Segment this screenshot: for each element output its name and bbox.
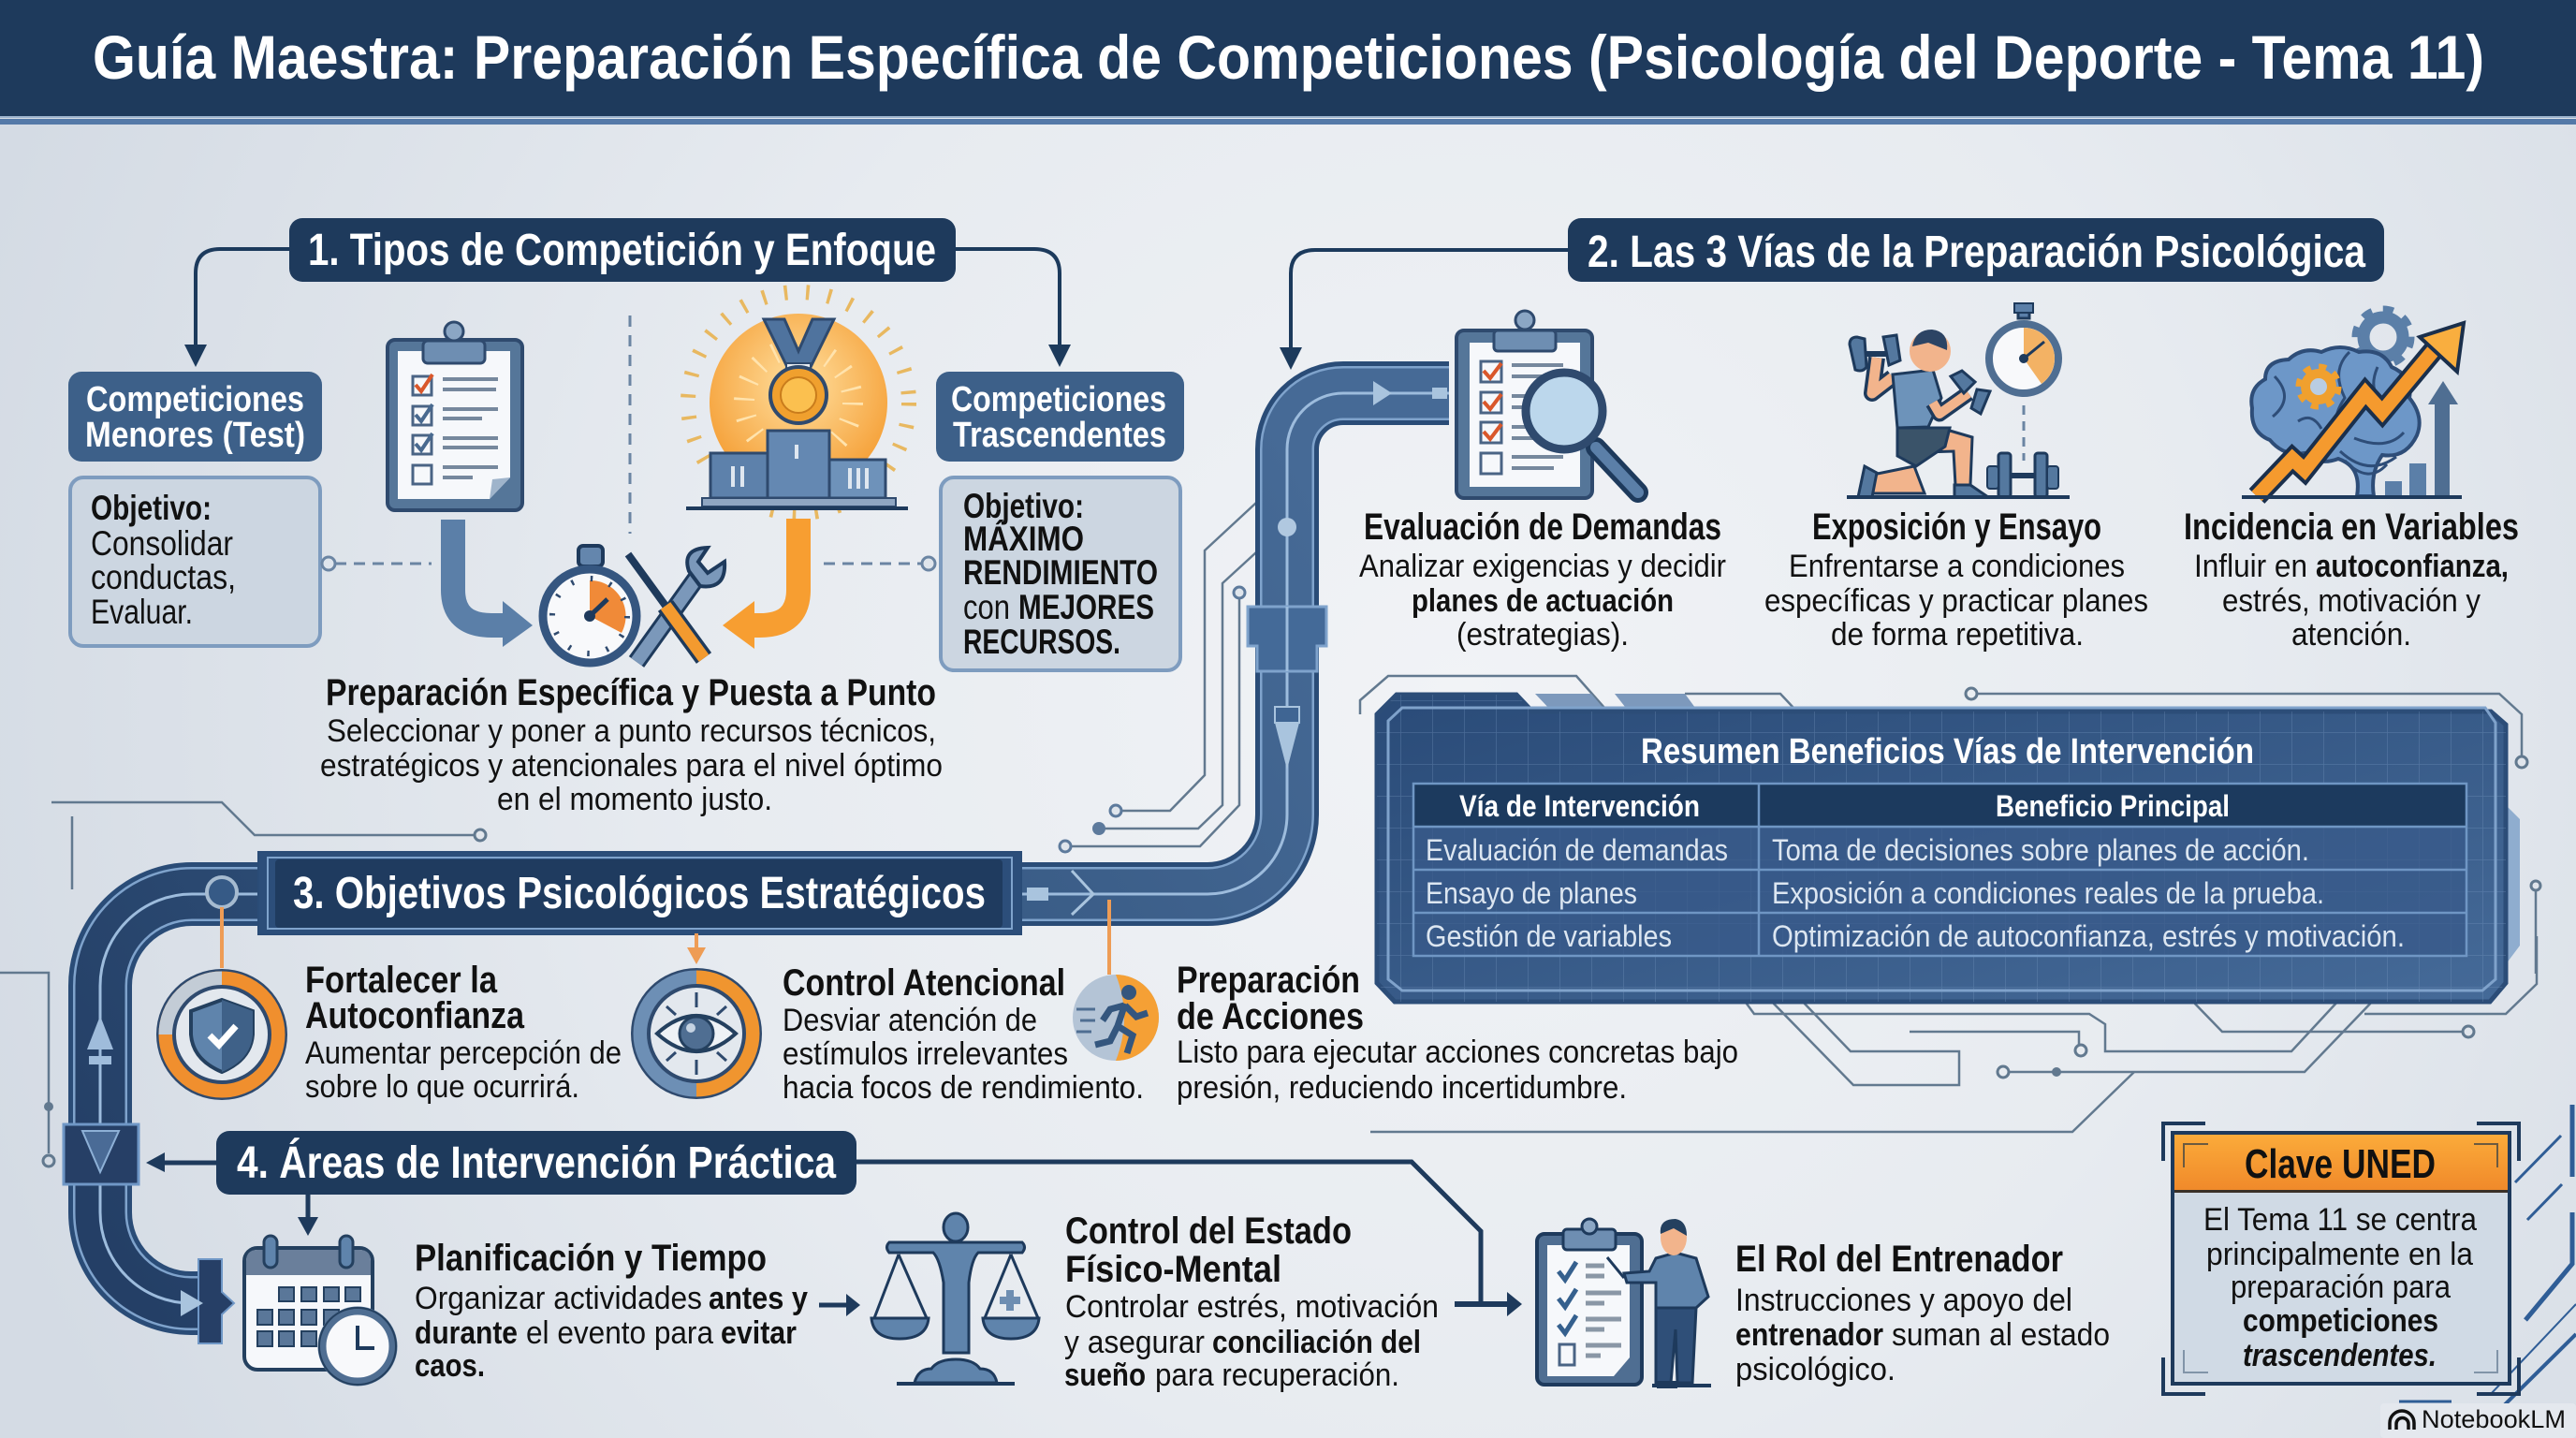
panel: resumen beneficios table: Ensayo de planes [1426,876,1637,910]
divider dashed [629,315,631,534]
panel: competiciones menores: Objetivo: [91,489,212,527]
text block: incidencia en variables: Influir en [2194,549,2307,584]
text block: planificación y tiempo: Planificación y Tiempo [415,1238,767,1279]
arrow: orange into preparation [723,519,798,649]
text block: control atencional [783,962,1144,1106]
text block: incidencia en variables: autoconfianza, [2316,549,2509,584]
text block: fortalecer la autoconfianza [305,960,622,1105]
text block: control del estado: Controlar estrés, motivación [1065,1289,1439,1325]
text block: exposición y ensayo: Enfrentarse a condiciones [1789,549,2125,584]
text block: planificación y tiempo: antes y [709,1281,808,1316]
panel: resumen beneficios table [1377,694,2520,1002]
icon: shield ring [156,969,287,1100]
text block: incidencia en variables: estrés, motivación y [2222,583,2481,619]
text block: preparación específica [320,672,943,817]
panel: resumen beneficios table: Resumen Beneficios Vías de Intervención [1641,732,2254,771]
panel: resumen beneficios table: Evaluación de demandas [1426,833,1728,867]
panel: competiciones menores: Competiciones [86,380,304,419]
text block: control del estado: sueño [1064,1357,1146,1393]
heading: section 3: 3. Objetivos Psicológicos Estratégicos [293,869,986,918]
text block: control del estado: para recuperación. [1155,1357,1399,1393]
panel: resumen beneficios table: Beneficio Principal [1996,789,2230,823]
text block: control atencional: Control Atencional [783,962,1065,1004]
text block: control atencional: estímulos irrelevantes [783,1036,1068,1072]
panel: competiciones trascendentes: Objetivo: [963,487,1084,525]
icon: coach with clipboard [1537,1219,1711,1387]
text block: exposición y ensayo: Exposición y Ensayo [1812,506,2101,548]
callout: clave uned: Clave UNED [2245,1141,2436,1187]
text block: el rol del entrenador [1735,1239,2110,1387]
icon: eye ring [631,968,762,1099]
callout: clave uned [2163,1123,2519,1394]
text block: fortalecer la autoconfianza: sobre lo que ocurrirá. [305,1069,579,1105]
text block: planificación y tiempo [415,1238,808,1384]
text block: fortalecer la autoconfianza: Fortalecer la [305,960,498,1001]
heading: section 1 [184,218,1071,367]
callout: clave uned: El Tema 11 se centra [2203,1202,2477,1238]
panel: competiciones menores [68,372,322,646]
text block: evaluación de demandas: (estrategias). [1456,617,1629,653]
panel: resumen beneficios table: Gestión de variables [1426,919,1672,953]
panel: competiciones menores: Menores (Test) [85,416,305,455]
text block: control atencional: hacia focos de rendimiento. [783,1070,1144,1106]
panel: resumen beneficios table: Toma de decisiones sobre planes de acción. [1772,833,2309,867]
panel: competiciones menores: conductas, [91,558,236,596]
panel: resumen beneficios table: Optimización de autoconfianza, estrés y motivación. [1772,919,2405,953]
panel: competiciones trascendentes: con [963,588,1010,626]
decorative diagonal lines [2399,1105,2576,1438]
panel: competiciones trascendentes: Competiciones [951,380,1166,419]
text block: preparación de acciones: Preparación [1177,960,1360,1001]
heading: section 2 [1280,218,2384,370]
panel: competiciones trascendentes: MÁXIMO [963,520,1084,558]
dashed connectors [322,557,935,570]
text block: preparación de acciones: presión, reduciendo incertidumbre. [1177,1070,1627,1106]
text block: exposición y ensayo [1764,506,2148,653]
text block: preparación específica: Seleccionar y poner a punto recursos técnicos, [327,713,936,749]
icon: stopwatch and tools [543,546,724,663]
text block: control del estado: y asegurar [1064,1325,1205,1360]
heading: section 3 [258,852,1021,934]
title bar [0,0,2576,125]
text block: fortalecer la autoconfianza: Autoconfianza [305,995,525,1036]
callout: clave uned: trascendentes. [2243,1338,2437,1373]
icon: brain with rising arrow [2242,310,2464,499]
heading: section 4: 4. Áreas de Intervención Práctica [237,1137,836,1188]
callout: clave uned: competiciones [2243,1303,2438,1339]
pipeline connecting sections [64,381,1449,1343]
icon: medal on podium [686,292,909,513]
panel: resumen beneficios table: Exposición a condiciones reales de la prueba. [1772,876,2324,910]
text block: preparación de acciones: de Acciones [1177,996,1364,1037]
text block: control atencional: Desviar atención de [783,1003,1037,1038]
text block: el rol del entrenador: Instrucciones y apoyo del [1735,1283,2072,1318]
watermark: notebooklm: NotebookLM [2422,1405,2566,1433]
watermark: notebooklm [2380,1403,2576,1438]
text block: el rol del entrenador: psicológico. [1735,1352,1895,1387]
text block: control del estado: conciliación del [1212,1325,1421,1360]
callout: clave uned: preparación para [2231,1269,2451,1305]
icon: runner [1073,975,1159,1061]
icon: balance figure [871,1213,1039,1386]
arrow: planning to control [819,1294,860,1316]
text block: incidencia en variables [2184,506,2519,653]
panel: competiciones menores: Evaluar. [91,593,193,631]
panel: competiciones trascendentes: RECURSOS. [963,623,1120,661]
heading: section 1: 1. Tipos de Competición y Enfoque [308,226,936,275]
panel: competiciones trascendentes: MEJORES [1018,588,1154,626]
panel: competiciones menores: Consolidar [91,524,233,563]
icon: athlete with stopwatch [1847,303,2070,499]
text block: planificación y tiempo: caos. [415,1348,485,1384]
text block: control del estado [1064,1211,1439,1393]
text block: exposición y ensayo: específicas y practicar planes [1764,583,2148,619]
orange connectors [222,900,1109,975]
text block: preparación específica: estratégicos y atencionales para el nivel óptimo [320,748,943,784]
arrow: blue into preparation [453,520,533,647]
text block: planificación y tiempo: Organizar actividades [415,1281,702,1316]
heading: section 2: 2. Las 3 Vías de la Preparación Psicológica [1588,227,2365,277]
text block: control del estado: Control del Estado [1065,1211,1352,1252]
text block: planificación y tiempo: evitar [721,1315,797,1351]
text block: preparación específica: Preparación Específica y Puesta a Punto [326,672,936,713]
panel: competiciones trascendentes [936,372,1184,670]
arrow: into coach [1455,1292,1522,1316]
panel: competiciones trascendentes: Trascendentes [953,416,1166,455]
text block: el rol del entrenador: entrenador [1735,1317,1883,1353]
callout: clave uned: principalmente en la [2206,1237,2473,1272]
text block: planificación y tiempo: el evento para [526,1315,713,1351]
text block: incidencia en variables: atención. [2291,617,2411,653]
text block: planificación y tiempo: durante [415,1315,518,1351]
text block: exposición y ensayo: de forma repetitiva. [1831,617,2084,653]
text block: preparación específica: en el momento justo. [497,782,772,817]
icon: clipboard with magnifier [1456,311,1638,498]
icon: checklist clipboard [388,322,522,510]
panel: competiciones trascendentes: RENDIMIENTO [963,553,1158,592]
text block: preparación de acciones: Listo para ejecutar acciones concretas bajo [1177,1034,1738,1070]
text block: control del estado: Físico-Mental [1065,1249,1281,1290]
heading: section 4 [146,1131,1481,1304]
text block: evaluación de demandas: planes de actuación [1412,583,1674,619]
panel: resumen beneficios table: Vía de Intervención [1459,789,1700,823]
text block: preparación de acciones [1177,960,1738,1106]
text block: evaluación de demandas [1359,506,1726,653]
icon: calendar and clock [244,1236,396,1385]
text block: el rol del entrenador: suman al estado [1892,1317,2110,1353]
text block: el rol del entrenador: El Rol del Entrenador [1735,1239,2063,1280]
decorative circuit traces [0,503,2540,1167]
text block: evaluación de demandas: Analizar exigencias y decidir [1359,549,1726,584]
text block: fortalecer la autoconfianza: Aumentar percepción de [305,1035,622,1071]
text block: evaluación de demandas: Evaluación de Demandas [1364,506,1721,548]
